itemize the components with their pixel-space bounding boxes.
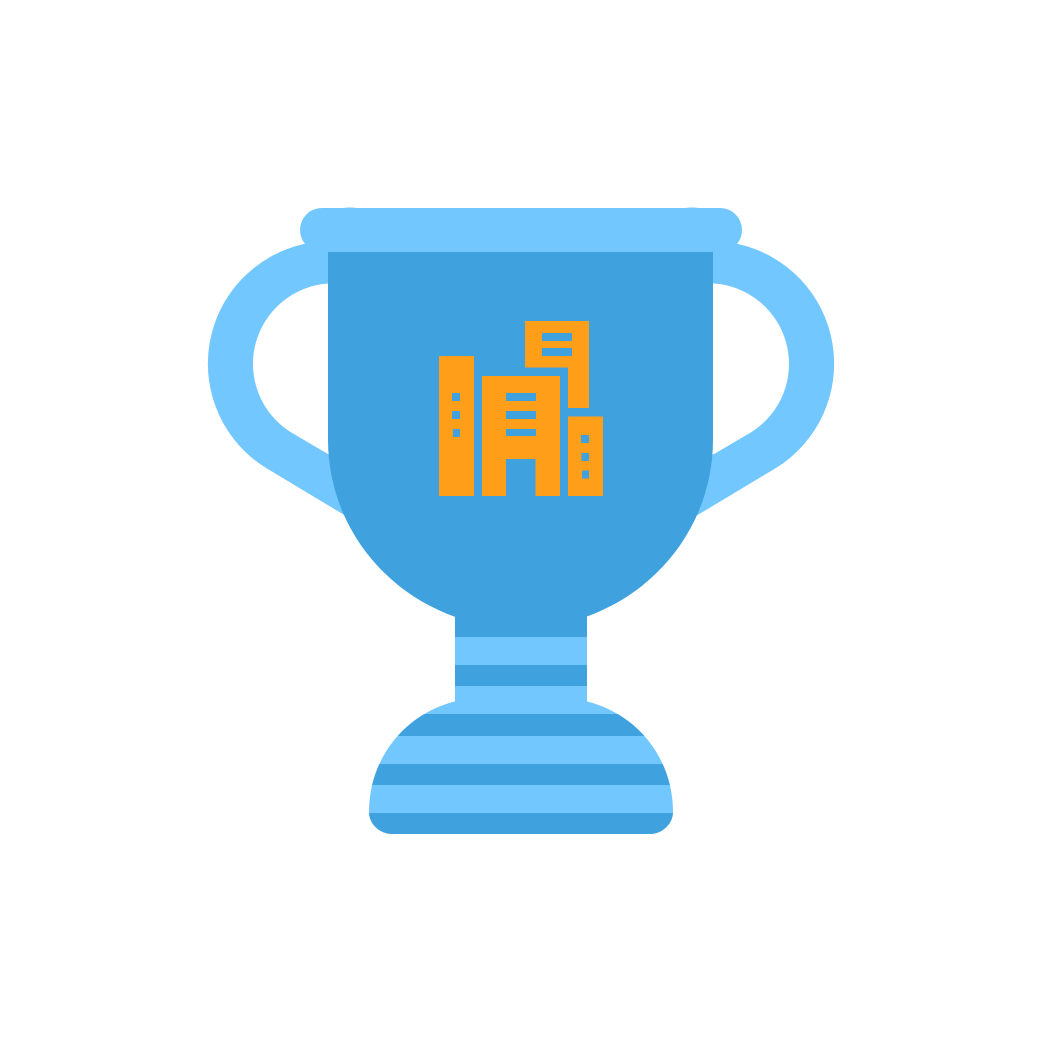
right handle [692,236,834,516]
trophy illustration [208,208,834,834]
trophy base [369,702,673,834]
trophy stem [455,610,587,714]
right building [568,416,603,496]
trophy cup [328,251,713,628]
icon: city buildings [439,321,603,496]
trophy rim [300,208,742,252]
left handle [208,236,350,516]
rear building [525,321,589,408]
centre building [482,376,560,496]
left tower [439,356,474,496]
